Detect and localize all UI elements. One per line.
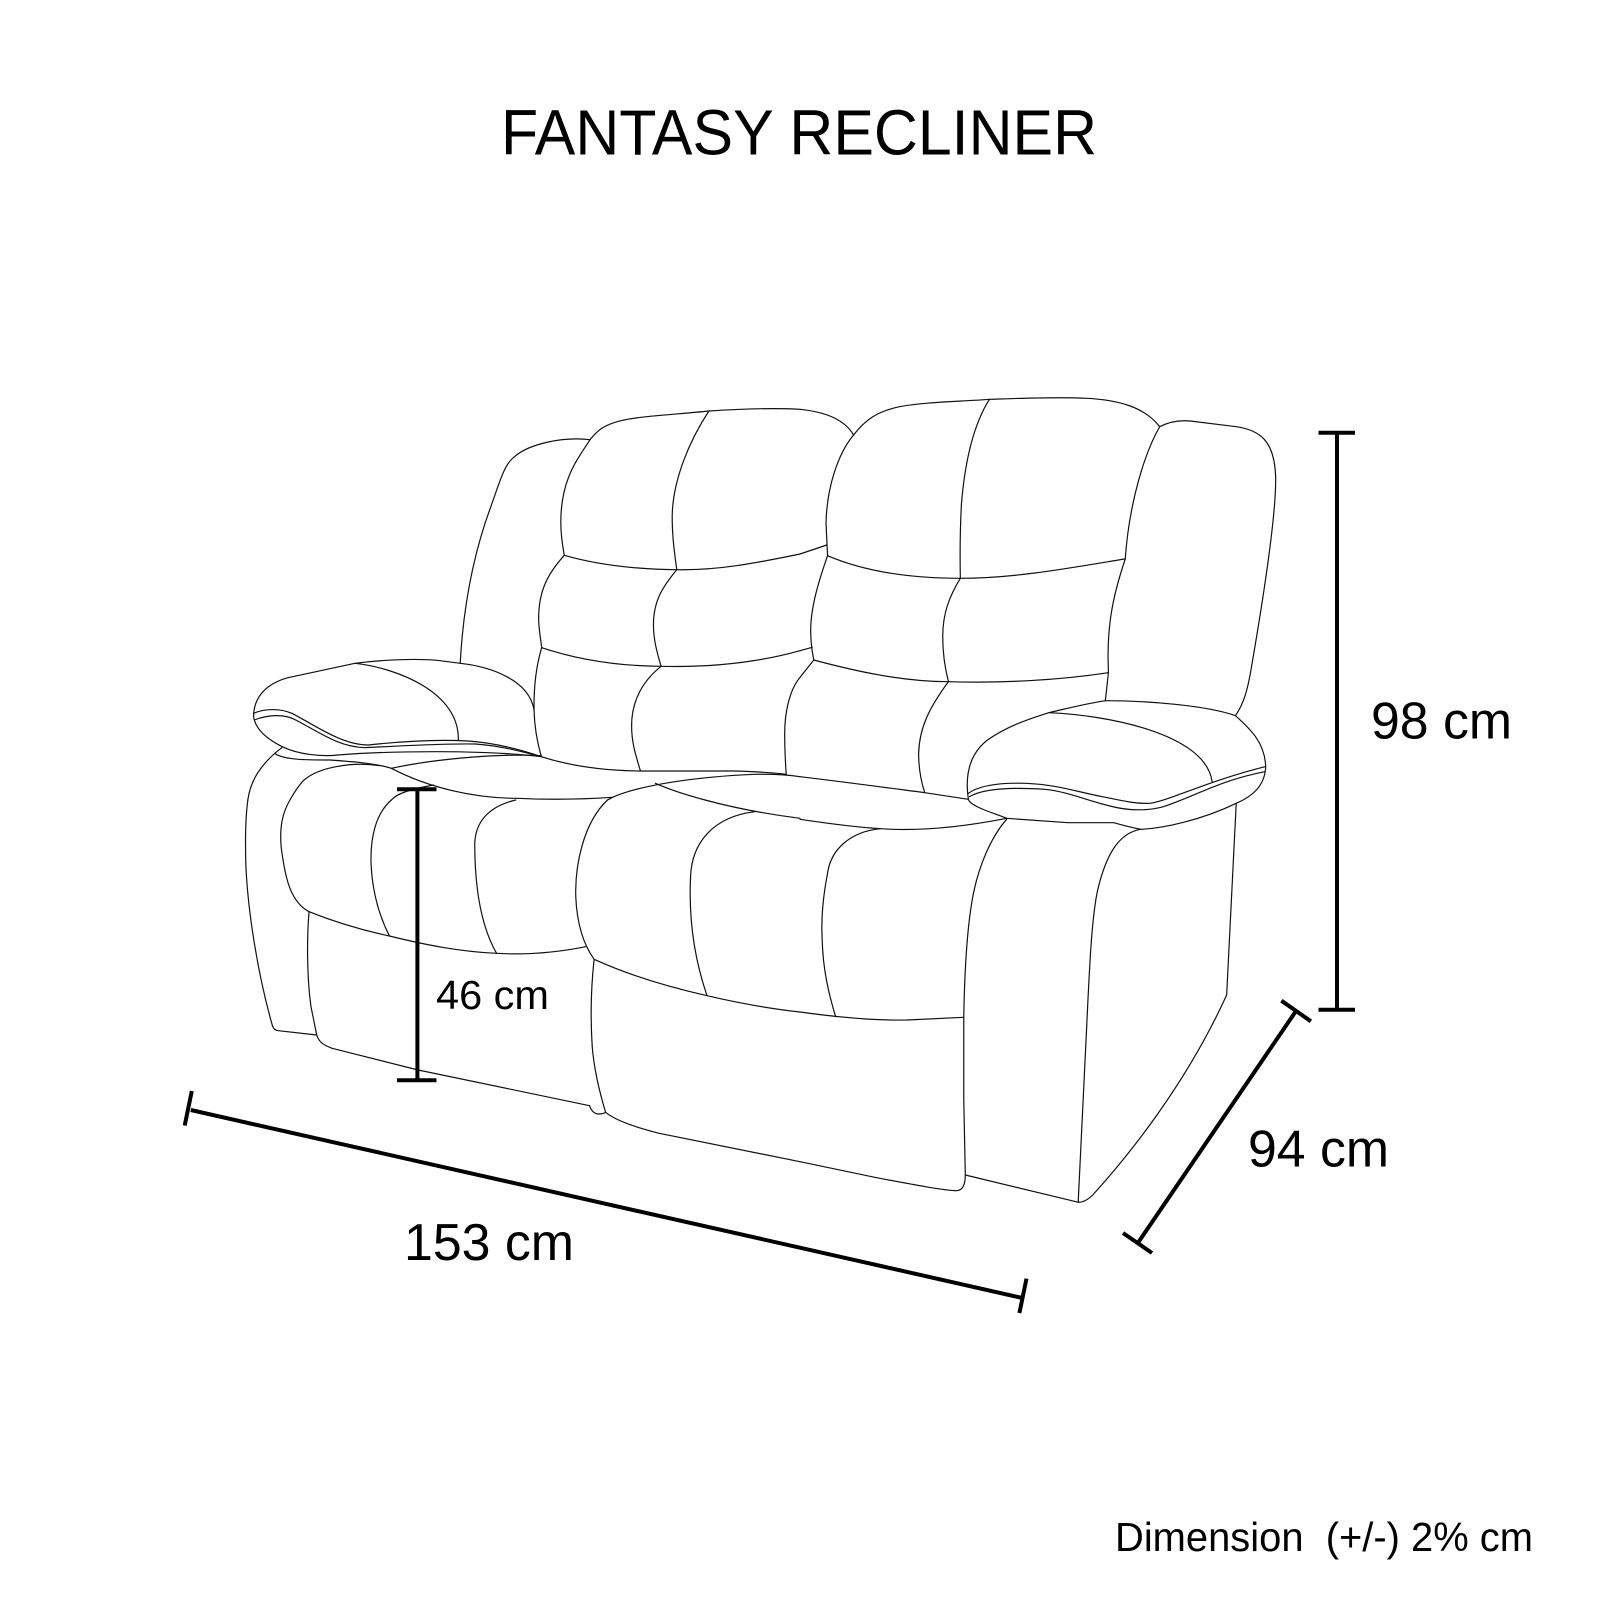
sofa lower right: right seat cushion and side panel — [800, 803, 1236, 1202]
sofa upper left: left back cushion and left armrest — [248, 409, 800, 800]
dimension: depth 94 cm: 94 cm — [1248, 1121, 1389, 1179]
sofa upper right: right back cushion and right armrest — [800, 398, 1276, 818]
dimension: width 153 cm — [185, 1091, 1026, 1313]
sofa lower left: left seat cushion and footrest — [245, 800, 800, 1162]
dimension: width 153 cm: 153 cm — [404, 1214, 574, 1272]
dimension: depth 94 cm — [1123, 1001, 1389, 1253]
dimension: seat height 46 cm: 46 cm — [436, 972, 549, 1018]
dimension: height 98 cm: 98 cm — [1371, 692, 1512, 750]
title: FANTASY RECLINER — [501, 96, 1097, 168]
dimension tolerance note: Dimension (+/-) 2% cm — [1115, 1514, 1533, 1560]
sofa line drawing — [245, 398, 1276, 1202]
